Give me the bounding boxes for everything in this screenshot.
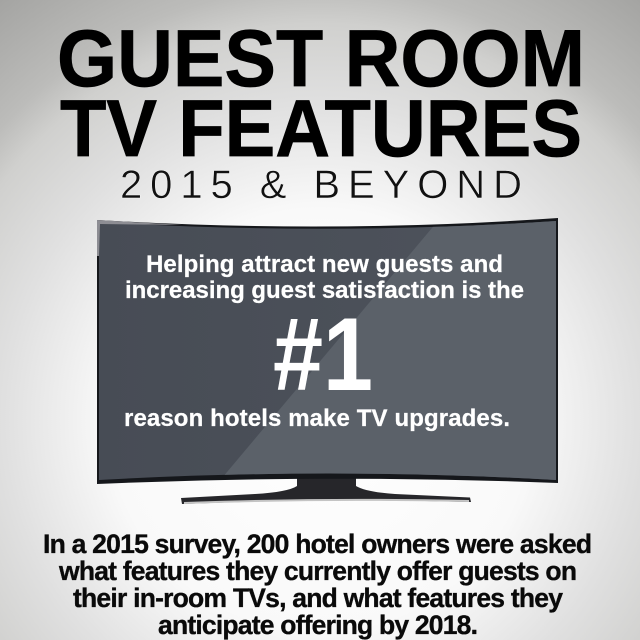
survey description: their in-room TVs, and what features they bbox=[73, 583, 563, 613]
screen text: increasing guest satisfaction is the bbox=[125, 277, 524, 304]
screen text: reason hotels make TV upgrades. bbox=[124, 405, 510, 432]
survey description: what features they currently offer guests on bbox=[58, 556, 577, 586]
screen text: Helping attract new guests and bbox=[146, 251, 503, 278]
survey description: In a 2015 survey, 200 hotel owners were asked bbox=[43, 529, 592, 559]
screen text bbox=[124, 251, 524, 432]
TV screen bbox=[99, 221, 556, 480]
title bbox=[57, 14, 585, 174]
survey description: anticipate offering by 2018. bbox=[158, 610, 478, 640]
icon: TV stand bbox=[181, 476, 471, 504]
survey description bbox=[43, 529, 592, 640]
screen glare bbox=[222, 218, 556, 482]
title: GUEST ROOM bbox=[57, 14, 585, 104]
big number: #1 bbox=[273, 297, 373, 413]
frame highlight bbox=[97, 220, 183, 256]
icon: TV frame bbox=[97, 218, 558, 484]
title: TV FEATURES bbox=[60, 84, 582, 174]
subtitle: 2015 & BEYOND bbox=[120, 163, 522, 207]
television bbox=[97, 218, 558, 504]
